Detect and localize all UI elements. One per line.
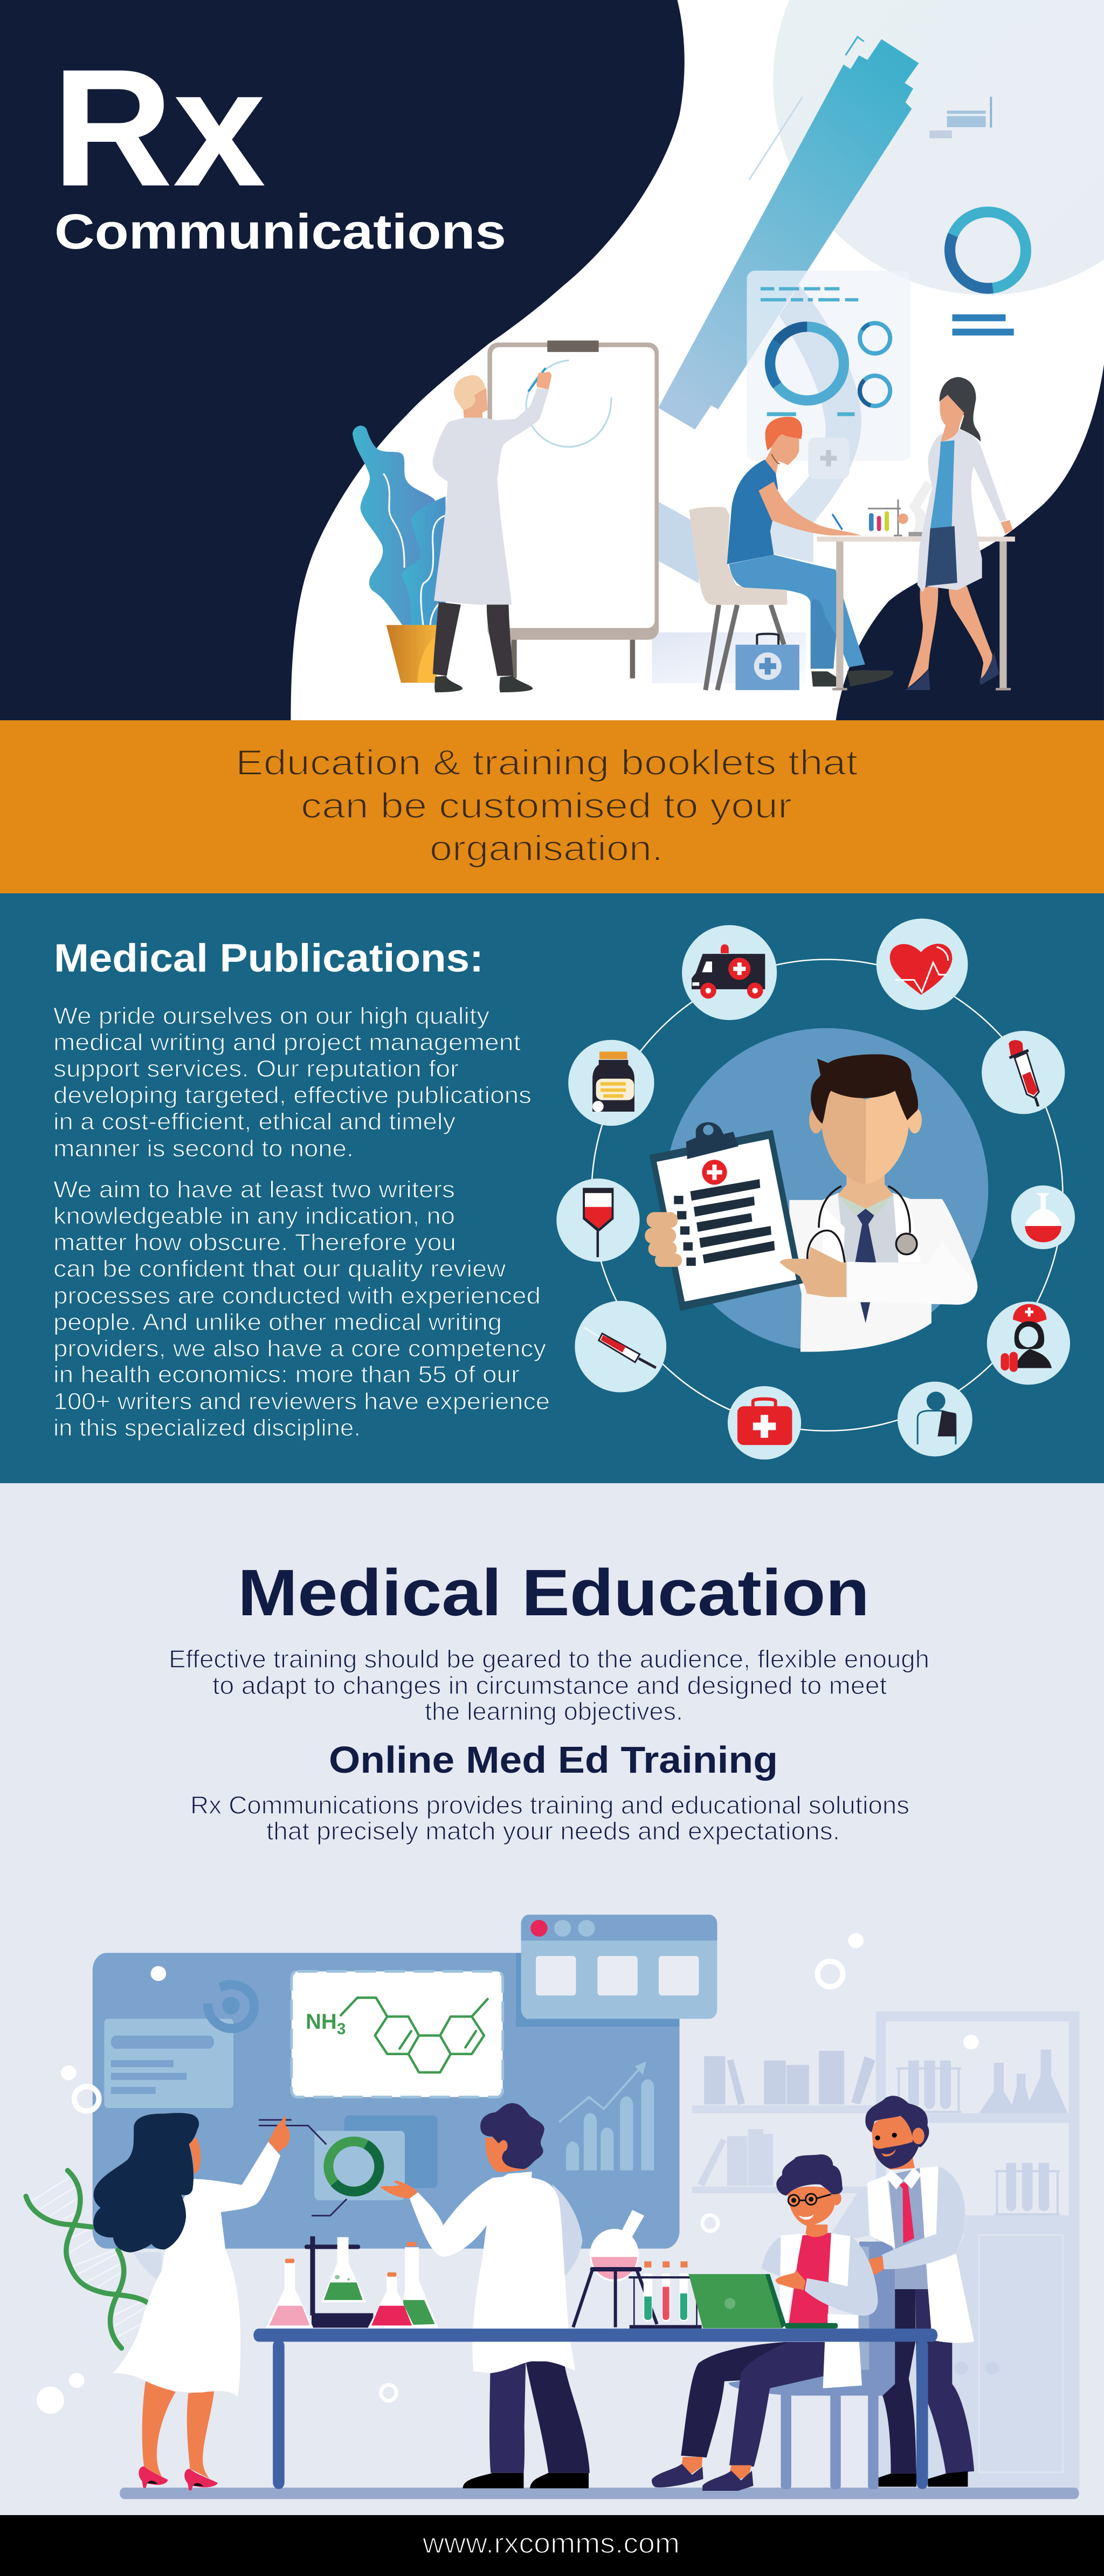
growth chart and bench glassware: [559, 2062, 702, 2329]
doctor backdrop: [665, 1028, 988, 1351]
paragraph two: 100+ writers and reviewers have experience: [53, 1388, 550, 1415]
plus tag: [808, 438, 850, 479]
paragraph two: We aim to have at least two writers: [53, 1176, 455, 1203]
left hand: [645, 1212, 682, 1267]
round flask on tripod: [573, 2210, 657, 2327]
open hand: [380, 2180, 418, 2199]
pale chart panel: [747, 271, 910, 461]
clipboard: [650, 1122, 803, 1311]
face: [189, 2137, 201, 2174]
hair: [93, 2113, 199, 2253]
panel: medical education: [0, 1483, 1104, 2515]
ankles: [682, 2457, 751, 2481]
diagonal blue band: [658, 39, 919, 430]
icon: ambulance: [682, 925, 777, 1020]
website url: www.rxcomms.com: [422, 2528, 680, 2559]
lab illustration: [26, 1914, 1079, 2499]
neck and face: [485, 2138, 528, 2172]
seated man: [652, 2154, 878, 2491]
wordmark: Communications: Communications: [54, 204, 506, 259]
thin accent lines: [749, 37, 864, 180]
dashed text lines: [761, 287, 858, 416]
wordmark: Rx: Rx: [52, 34, 267, 221]
intro paragraph: [169, 1645, 929, 1725]
face: [820, 1089, 866, 1184]
lapels: [822, 1196, 921, 1262]
standing man shoes: [879, 2471, 968, 2487]
pale band behind chair: [652, 498, 699, 583]
paragraph one: [53, 1003, 532, 1162]
paragraph two: knowledgeable in any indication, no: [53, 1203, 455, 1229]
hair: [811, 1055, 918, 1124]
big donut: [770, 327, 844, 401]
coat left panel: [867, 2175, 895, 2248]
chair: [689, 507, 787, 690]
seated man trousers: [681, 2342, 825, 2467]
face: [788, 2187, 834, 2226]
text card: [104, 2019, 233, 2108]
white dress: [113, 2141, 280, 2396]
vest: [888, 2168, 928, 2289]
ears: [809, 1107, 922, 1133]
ear: [499, 2140, 508, 2152]
hair: [865, 2096, 929, 2147]
hand: [775, 2270, 805, 2290]
panel: hero: [0, 0, 1104, 721]
DNA strands: [26, 2171, 148, 2348]
icon: injured person: [898, 1382, 972, 1456]
right sleeve: [805, 2236, 878, 2316]
navy wave left: [0, 0, 685, 721]
small donuts: [860, 323, 890, 406]
test tube rack: [629, 2261, 702, 2329]
glasses: [788, 2194, 831, 2206]
red shirt: [788, 2233, 831, 2327]
red tie: [899, 2181, 914, 2243]
subheading: Online Med Ed Training: Online Med Ed Training: [329, 1739, 778, 1781]
panel: footer bar: [0, 2515, 1104, 2576]
trousers: [489, 2361, 526, 2473]
floor strip: [120, 2488, 1079, 2499]
big blue screen: [93, 1953, 679, 2249]
intro paragraph: the learning objectives.: [425, 1697, 683, 1725]
banner text: Education & training booklets that: [236, 742, 858, 782]
pale back sleeve: [134, 2253, 163, 2280]
donut top right: [950, 212, 1026, 288]
paragraph two: can be confident that our quality review: [53, 1256, 506, 1282]
colleagues at laptop: [652, 2096, 974, 2491]
coat lower: [823, 2342, 862, 2388]
seated man: [727, 417, 893, 686]
green laptop: [689, 2274, 838, 2329]
seated man shoes: [652, 2464, 753, 2491]
paragraph two: processes are conducted with experienced: [53, 1283, 541, 1309]
hair: [776, 2154, 843, 2196]
test tubes and microscope: [868, 480, 933, 536]
collar: [838, 1189, 893, 1216]
standing man trousers: [882, 2289, 974, 2474]
standing man: [832, 2096, 974, 2487]
hair: [480, 2103, 544, 2169]
paragraph two: matter how obscure. Therefore you: [53, 1229, 456, 1256]
neck: [838, 1165, 893, 1209]
banner text: organisation.: [430, 828, 663, 868]
banner text: [236, 742, 858, 868]
heading: Medical Education: Medical Education: [238, 1556, 870, 1629]
paragraph one: manner is second to none.: [53, 1135, 354, 1162]
paragraph two: [53, 1176, 550, 1441]
hero chart backdrop: [652, 271, 1014, 683]
stethoscope: [808, 1186, 917, 1262]
intro paragraph: to adapt to changes in circumstance and designed to meet: [212, 1671, 887, 1699]
target ring: [208, 1985, 254, 2028]
icon: flask: [1011, 1186, 1075, 1249]
icon: nurse: [987, 1301, 1070, 1385]
pale crescent: [769, 285, 861, 563]
doctor and icon ring: [556, 919, 1075, 1459]
top-right pale disc: [773, 0, 1104, 295]
banner text: can be customised to your: [301, 786, 792, 825]
coat: [789, 1193, 977, 1352]
medical bag: [735, 634, 799, 690]
icon: pill bottle: [568, 1040, 654, 1126]
pale floor block: [652, 632, 806, 683]
paragraph two: in this specialized discipline.: [53, 1415, 361, 1441]
lab table: [253, 2329, 937, 2489]
training paragraph: [190, 1791, 909, 1845]
pale left sleeve: [762, 2237, 781, 2277]
whiteboard, plant and presenter: [353, 341, 659, 692]
plant: [353, 425, 446, 683]
shirt: [838, 1195, 899, 1262]
ring: [591, 960, 1063, 1431]
lab desk: [817, 536, 1015, 691]
navy wave right: [836, 364, 1104, 721]
tie: [855, 1209, 876, 1323]
pointing hand: [779, 1247, 846, 1297]
collar: [885, 2167, 921, 2189]
icon: dropper: [982, 1031, 1065, 1114]
NH3 label: 3: [337, 2020, 346, 2038]
whiteboard: [487, 341, 659, 678]
sleeve: [882, 2166, 965, 2269]
paragraph two: in health economics: more than 55 of our: [53, 1361, 520, 1388]
ear and eyes: [875, 2128, 924, 2144]
browser window: [521, 1914, 717, 2019]
paragraph one: support services. Our reputation for: [53, 1056, 459, 1082]
training paragraph: Rx Communications provides training and educational solutions: [190, 1791, 909, 1819]
two bars: [953, 314, 1014, 335]
white dots and rings: [37, 1933, 979, 2414]
standing woman: [898, 377, 1013, 690]
paragraph two: providers, we also have a core competency: [53, 1335, 546, 1362]
coat right panel: [920, 2166, 974, 2343]
icon: first aid kit: [728, 1386, 801, 1459]
paragraph one: medical writing and project management: [53, 1029, 521, 1056]
presenter: [433, 368, 551, 692]
second scientist: [380, 2103, 590, 2488]
ear: [830, 2192, 841, 2205]
icon: syringe: [575, 1301, 666, 1393]
background shelves and cabinet: [692, 2012, 1079, 2489]
small chart widget: [929, 97, 992, 138]
back sleeve: [551, 2184, 583, 2277]
pointing hand: [268, 2115, 290, 2152]
panel: orange banner: [0, 720, 1104, 893]
coat panels: [779, 2233, 858, 2327]
hero team scene: [689, 377, 1015, 691]
neck: [805, 2224, 827, 2237]
test flasks and stand: [266, 2236, 438, 2327]
hero background shapes: [0, 0, 1104, 721]
paragraph one: We pride ourselves on our high quality: [53, 1003, 489, 1029]
lab backdrop: [37, 1914, 1079, 2499]
paragraph one: in a cost-efficient, ethical and timely: [53, 1108, 456, 1135]
face: [872, 2116, 915, 2169]
DNA helix and scientist woman: [26, 2113, 290, 2491]
heading: Medical Publications:: [54, 936, 484, 980]
smile: [799, 2214, 814, 2220]
red shoes: [139, 2467, 218, 2491]
green ring card: [259, 2116, 438, 2216]
paragraph two: people. And unlike other medical writing: [53, 1309, 502, 1335]
molecule card: [292, 1971, 503, 2097]
icon: heart: [877, 919, 968, 1010]
icon: blood bag: [556, 1179, 640, 1262]
panel: medical publications: [0, 893, 1104, 1483]
paragraph one: developing targeted, effective publications: [53, 1082, 532, 1108]
beard: [873, 2141, 919, 2169]
DNA rungs: [32, 2178, 147, 2337]
training paragraph: that precisely match your needs and expectations.: [266, 1817, 840, 1845]
lab coat: [410, 2172, 575, 2373]
chair: [729, 2242, 895, 2489]
intro paragraph: Effective training should be geared to the audience, flexible enough: [169, 1645, 929, 1673]
NH3 label: NH: [306, 2010, 337, 2034]
back arm: [832, 2186, 869, 2238]
growth chart: [559, 2062, 654, 2171]
woman legs: [142, 2381, 214, 2478]
mouth: [881, 2149, 896, 2157]
pointing hand: [841, 2256, 884, 2276]
shoes: [463, 2473, 589, 2488]
doctor: [645, 1055, 977, 1352]
sleeve: [846, 1242, 977, 1305]
